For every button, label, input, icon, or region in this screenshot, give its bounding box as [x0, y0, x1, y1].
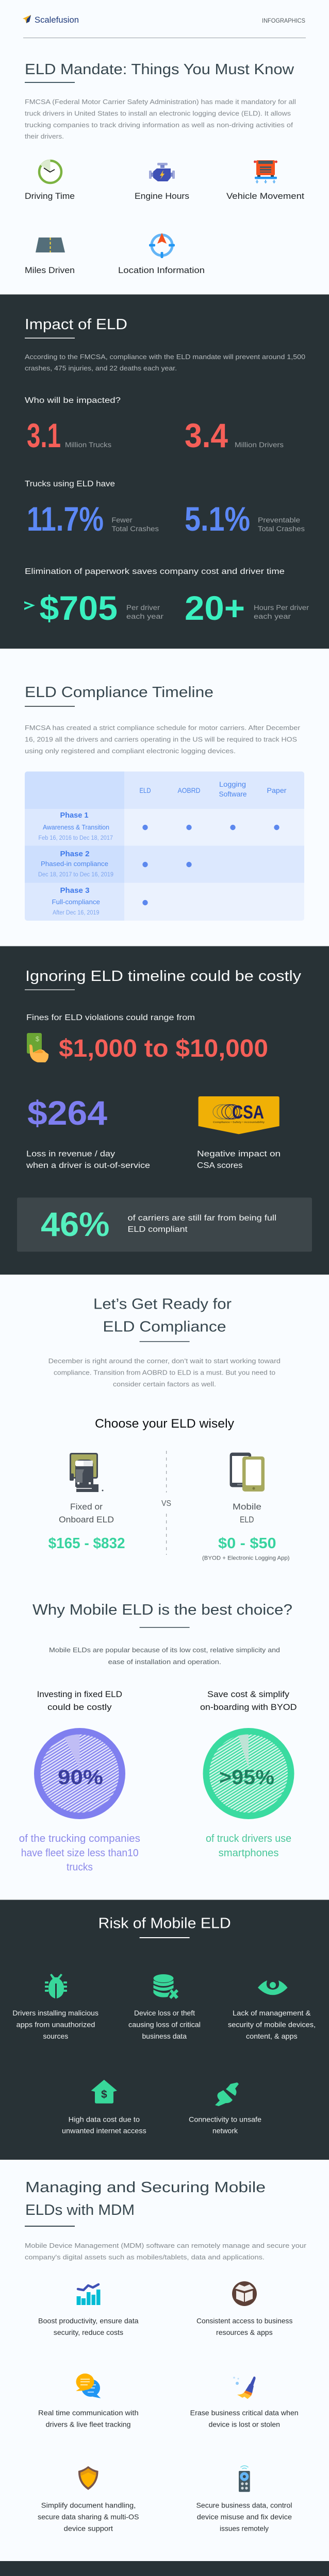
text: secure business: Secure business data, control	[196, 2501, 292, 2509]
text: MDM intro: Mobile Device Management (MDM) software can remotely manage and secure your	[25, 2242, 307, 2249]
text: erase data: Erase business critical data when	[190, 2409, 299, 2417]
text: consistent access: Consistent access to business	[196, 2316, 292, 2325]
callout: 46 percent: of carriers are still far from being full	[128, 1214, 276, 1223]
intro text: FMCSA (Federal Motor Carrier Safety Administration) has made it mandatory for all	[25, 98, 296, 106]
callout: 46 percent: 46%	[41, 1205, 109, 1243]
text: fixed ELD: Onboard ELD	[59, 1515, 114, 1524]
stat: 705 dollars: each year	[126, 613, 164, 620]
icon: remote	[239, 2466, 250, 2492]
text: 90 percent description: of the trucking companies	[19, 1833, 140, 1844]
callout: 46 percent	[17, 1197, 312, 1252]
section: compliance timeline	[25, 684, 304, 921]
stat: 11.7 percent: Total Crashes	[111, 525, 159, 533]
stat: 11.7 percent: 11.7%	[27, 500, 104, 538]
stat: 5.1 percent: Total Crashes	[258, 525, 305, 533]
column: fixed ELD heading	[37, 1689, 122, 1712]
icon: eye	[258, 1980, 288, 1995]
text: december: consider certain factors as well.	[113, 1380, 216, 1388]
row: phase 1: Feb 16, 2016 to Dec 18, 2017	[38, 835, 113, 841]
column: fixed ELD heading: could be costly	[47, 1702, 112, 1712]
section: get ready	[48, 1296, 290, 1562]
text: 90 percent description: trucks	[67, 1862, 93, 1873]
chart: 95 percent: >95%	[219, 1766, 274, 1789]
icon: money in hand	[27, 1033, 48, 1062]
price: mobile ELD	[202, 1535, 290, 1562]
title: ELD Mandate: ELD Mandate: Things You Must Know	[25, 61, 294, 78]
icon: plug	[215, 2082, 239, 2106]
row: phase 3	[52, 886, 148, 916]
price: mobile ELD: $0 - $50	[218, 1535, 276, 1552]
row: phase 2: Dec 18, 2017 to Dec 16, 2019	[38, 872, 113, 878]
heading: let's get ready: Let’s Get Ready for	[93, 1296, 232, 1313]
heading: choose wisely: Choose your ELD wisely	[95, 1417, 234, 1431]
text: mobile ELDs popular: ease of installation and operation.	[108, 1658, 221, 1666]
text: malicious apps: Drivers installing malicious	[12, 2009, 98, 2017]
icon: fixed ELD truck	[70, 1453, 103, 1492]
heading: why mobile: Why Mobile ELD is the best choice?	[32, 1602, 292, 1618]
stat: 20 plus hours: Hours Per driver	[254, 604, 309, 612]
label: miles driven: Miles Driven	[25, 265, 75, 275]
subheading: who will be impacted: Who will be impacted?	[25, 396, 121, 405]
row: phase 2: Phase 2	[60, 850, 90, 858]
heading: let's get ready: ELD Compliance	[103, 1318, 226, 1335]
text: 95 percent description: of truck drivers use	[206, 1833, 291, 1844]
stat: 5.1 percent: Preventable	[258, 516, 300, 524]
stat: 3.1 million trucks: Million Trucks	[65, 441, 111, 449]
label: vehicle movement: Vehicle Movement	[226, 191, 304, 201]
heading: managing: Managing and Securing Mobile	[25, 2179, 266, 2196]
text: consistent access	[196, 2316, 292, 2336]
text: mobile ELDs popular: Mobile ELDs are popular because of its low cost, relative simplicity and	[49, 1647, 280, 1654]
icon: house dollar	[91, 2080, 117, 2104]
icon: clock	[39, 160, 61, 183]
icon: chart	[77, 2284, 100, 2305]
divider: versus: VS	[161, 1499, 171, 1508]
heading: compliance timeline: ELD Compliance Timeline	[25, 684, 213, 701]
text: loss in revenue: when a driver is out-of-service	[26, 1161, 150, 1170]
stat: 705 dollars: $705	[39, 589, 118, 627]
label: engine hours: Engine Hours	[135, 191, 189, 201]
icon: road	[36, 238, 65, 252]
text: real time: Real time communication with	[38, 2409, 139, 2417]
text: consistent access: resources & apps	[216, 2328, 273, 2336]
text: simplify document	[38, 2501, 139, 2532]
stat: 3.4 million drivers: 3.4	[185, 416, 228, 454]
stat: 3.1 million trucks	[27, 416, 111, 454]
text: mobile ELD	[233, 1502, 261, 1524]
stat: 5.1 percent: 5.1%	[185, 500, 250, 538]
stat: 11.7 percent: Fewer	[111, 516, 133, 524]
stat: 20 plus hours: 20+	[185, 589, 245, 627]
section: ELD mandate intro	[23, 15, 306, 275]
stat: 3.4 million drivers: Million Drivers	[235, 441, 284, 449]
label: location information: Location Information	[118, 265, 205, 275]
text: mobile ELD: ELD	[240, 1515, 254, 1524]
text: erase data: device is lost or stolen	[208, 2420, 280, 2429]
row: phase 3: Full-compliance	[52, 898, 100, 906]
text: negative impact: Negative impact on	[197, 1150, 281, 1158]
text: device loss: Device loss or theft	[134, 2009, 195, 2017]
timeline text: using only registered and compliant electronic logging devices.	[25, 747, 236, 755]
text: connectivity: Connectivity to unsafe	[189, 2115, 261, 2123]
icon: house dollar: $	[101, 2089, 107, 2100]
stat: fine range: $1,000 to $10,000	[59, 1035, 268, 1062]
intro text	[25, 98, 296, 140]
impact text: According to the FMCSA, compliance with the ELD mandate will prevent around 1,500	[25, 353, 305, 361]
table header: Logging	[219, 780, 246, 788]
chart: 90 percent: 90%	[58, 1766, 103, 1789]
stat: 3.4 million drivers	[185, 416, 284, 454]
icon: money in hand: $	[36, 1035, 40, 1043]
table header	[139, 780, 287, 798]
text: fixed ELD: Fixed or	[70, 1502, 103, 1512]
callout: 46 percent: ELD compliant	[128, 1225, 188, 1234]
row: phase 1: Phase 1	[60, 811, 89, 820]
text: 95 percent description	[206, 1833, 291, 1859]
icon: truck movement	[254, 160, 277, 183]
text: negative impact: CSA scores	[197, 1161, 243, 1170]
text: high data cost: unwanted internet access	[62, 2127, 146, 2135]
price: fixed ELD: $165 - $832	[48, 1535, 125, 1552]
text: boost productivity: Boost productivity, ensure data	[38, 2316, 139, 2325]
heading: risk: Risk of Mobile ELD	[98, 1916, 231, 1932]
heading: impact of ELD: Impact of ELD	[25, 316, 127, 333]
text: device loss	[128, 2009, 201, 2040]
row: phase 1: Awareness & Transition	[43, 823, 109, 831]
text: secure business	[196, 2501, 292, 2532]
icon: bug	[45, 1974, 67, 1998]
panel: risk of mobile ELD	[0, 1900, 329, 2160]
text: high data cost	[62, 2115, 146, 2135]
text: device loss: causing loss of critical	[128, 2020, 201, 2028]
stat: 705 dollars: Per driver	[126, 604, 160, 612]
row: phase 2: Phased-in compliance	[41, 860, 108, 868]
icon: engine	[149, 163, 175, 181]
heading: ignoring ELD timeline: Ignoring ELD timeline could be costly	[25, 968, 302, 985]
table header: ELD	[139, 786, 151, 794]
column: fixed ELD heading: Investing in fixed ELD	[37, 1689, 122, 1699]
text: connectivity: network	[212, 2127, 238, 2135]
text: malicious apps: sources	[43, 2032, 68, 2040]
icon: shield	[78, 2466, 98, 2490]
text: device loss: business data	[142, 2032, 187, 2040]
text: erase data	[190, 2409, 299, 2429]
timeline text: 16, 2019 all the drivers and carriers operating in the US will be required to track HOS	[25, 736, 297, 743]
intro text: truck drivers in United States to install an electronic logging device (ELD). It allows	[25, 109, 291, 117]
stat: 20 plus hours	[185, 589, 309, 627]
text: mobile ELDs popular	[49, 1647, 280, 1666]
logo: CSA badge: Compliance • Safety • Accountability	[213, 1121, 265, 1123]
heading: managing	[25, 2179, 266, 2218]
timeline text	[25, 724, 301, 755]
text: MDM intro: company's digital assets such as mobiles/tablets, data and applications.	[25, 2253, 265, 2261]
icon: broom	[233, 2377, 256, 2399]
logo: CSA badge	[199, 1096, 279, 1134]
text: simplify document: secure data sharing & multi-OS	[38, 2513, 139, 2521]
text: boost productivity: security, reduce costs	[54, 2328, 123, 2336]
text: loss in revenue: Loss in revenue / day	[26, 1150, 115, 1158]
impact text: crashes, 475 injuries, and 22 deaths each year.	[25, 364, 177, 372]
icon: compass location	[149, 233, 175, 258]
row: phase 3: After Dec 16, 2019	[53, 910, 99, 916]
panel: ignoring timeline costs	[0, 946, 329, 1275]
logo: CSA badge: CSA	[232, 1101, 264, 1123]
icon: chat bubbles	[76, 2374, 101, 2398]
text: secure business: device misuse and fix device	[197, 2513, 292, 2521]
text: loss in revenue	[26, 1150, 150, 1170]
section: why mobile ELD	[19, 1602, 297, 1873]
icon: mobile phones	[230, 1453, 265, 1492]
icon: database loss	[154, 1974, 178, 1999]
column: BYOD heading	[200, 1689, 297, 1712]
text: 95 percent description: smartphones	[219, 1848, 278, 1859]
icon: box circle	[232, 2281, 257, 2306]
logo: Scalefusion: Scalefusion	[35, 15, 79, 25]
stat: 3.1 million trucks: 3.1	[27, 416, 61, 454]
text: fixed ELD	[59, 1502, 114, 1524]
table header: Paper	[267, 786, 287, 794]
text: real time	[38, 2409, 139, 2429]
table header: Software	[219, 790, 247, 798]
text: lack of management	[228, 2009, 316, 2040]
text: december	[48, 1357, 281, 1388]
price: mobile ELD: (BYOD + Electronic Logging App)	[202, 1555, 290, 1562]
text: secure business: issues remotely	[220, 2524, 269, 2532]
stat: 705 dollars	[24, 589, 164, 627]
label: driving time: Driving Time	[25, 191, 75, 201]
text: fines range: Fines for ELD violations could range from	[26, 1013, 195, 1022]
text: december: compliance. Transition from AOBRD to ELD is a must. But you need to	[54, 1369, 275, 1377]
text: real time: drivers & live fleet tracking	[46, 2420, 131, 2429]
column: BYOD heading: Save cost & simplify	[207, 1689, 290, 1699]
text: lack of management: Lack of management &	[233, 2009, 311, 2017]
stat: 5.1 percent	[185, 500, 305, 538]
table header: AOBRD	[177, 786, 200, 794]
stat: 264 dollars: $264	[27, 1094, 107, 1132]
text: negative impact	[197, 1150, 281, 1170]
heading: managing: ELDs with MDM	[25, 2202, 135, 2218]
row: phase 3: Phase 3	[60, 886, 90, 895]
text: 90 percent description: have fleet size less than10	[21, 1848, 139, 1859]
intro text: their drivers.	[25, 132, 64, 140]
intro text: trucking companies to track driving information as well as non-driving activities of	[25, 121, 293, 129]
text: connectivity	[189, 2115, 261, 2135]
text: high data cost: High data cost due to	[69, 2115, 140, 2123]
text: mobile ELD: Mobile	[233, 1502, 261, 1512]
text: lack of management: content, & apps	[246, 2032, 298, 2040]
chart: 90 percent	[34, 1728, 125, 1819]
label: infographics: INFOGRAPHICS	[262, 17, 305, 24]
panel: footer	[0, 2561, 329, 2576]
impact text	[25, 353, 305, 372]
heading: let's get ready	[93, 1296, 232, 1335]
text: simplify document: Simplify document handling,	[41, 2501, 136, 2509]
subheading: trucks using ELD: Trucks using ELD have	[25, 480, 115, 488]
panel: impact of ELD	[0, 295, 329, 649]
stat: 20 plus hours: each year	[254, 613, 291, 620]
text: malicious apps: apps from unauthorized	[17, 2020, 95, 2028]
row: phase 1	[38, 811, 279, 841]
table: compliance phases	[25, 772, 304, 921]
subheading: elimination of paperwork: Elimination of paperwork saves company cost and driver time	[25, 567, 285, 576]
text: boost productivity	[38, 2316, 139, 2336]
text: december: December is right around the corner, don’t wait to start working toward	[48, 1357, 281, 1365]
text: MDM intro	[25, 2242, 307, 2261]
row: phase 2	[38, 850, 192, 878]
chart: 95 percent	[203, 1728, 294, 1819]
text: simplify document: device support	[64, 2524, 113, 2532]
section: managing with MDM	[25, 2179, 307, 2532]
text: malicious apps	[12, 2009, 98, 2040]
timeline text: FMCSA has created a strict compliance schedule for motor carriers. After December	[25, 724, 301, 732]
column: BYOD heading: on-boarding with BYOD	[200, 1702, 297, 1712]
text: lack of management: security of mobile devices,	[228, 2020, 316, 2028]
text: 90 percent description	[19, 1833, 140, 1873]
